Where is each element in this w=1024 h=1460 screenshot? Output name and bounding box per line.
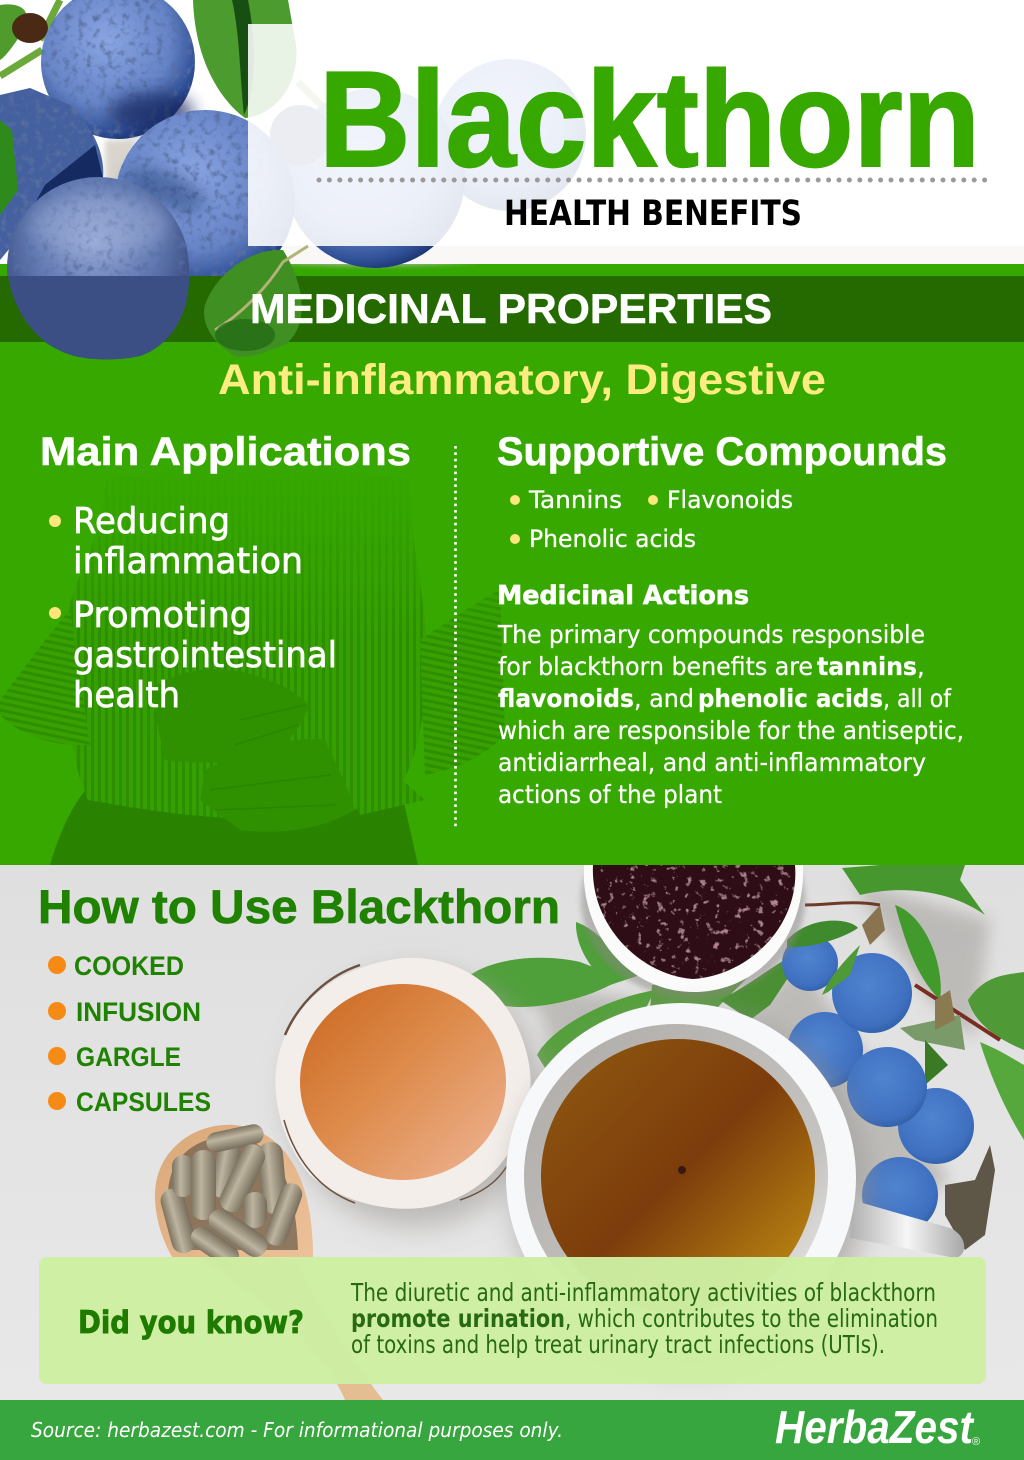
heading: main applications: Main Applications [40,430,411,474]
source note: Source: herbazest.com - For informational purposes only. [31,1418,563,1442]
text: did you know fact: promote urination [351,1304,565,1333]
text: medicinal actions description: for blackthorn benefits are [498,652,813,681]
footer bar [0,1400,1024,1460]
bullet: reducing inflammation: inflammation [73,541,303,582]
callout: did you know [39,1257,986,1384]
illustration: blue plums [782,921,974,1233]
illustration: bowl of jam [578,865,808,1000]
list: uses: CAPSULES [76,1087,211,1117]
list: uses: GARGLE [76,1042,181,1072]
subheading: properties: Anti-inflammatory, Digestive [218,356,826,404]
list: uses: COOKED [74,951,184,981]
text: medicinal actions description: , [917,652,925,681]
text: did you know fact [350,1278,938,1359]
heading: medicinal properties: MEDICINAL PROPERTIES [250,285,772,332]
heading: did you know: Did you know? [78,1305,304,1341]
list: compounds [510,486,793,553]
bullet: promoting gastrointestinal health [49,595,337,716]
bullet: reducing inflammation [49,501,303,582]
text: medicinal actions description: phenolic acids [698,684,883,713]
text: medicinal actions description: flavonoids [498,684,634,713]
list: compounds: Flavonoids [667,486,793,514]
illustration: blackthorn fruits and leaves at top [0,0,1024,359]
heading: how to use: How to Use Blackthorn [38,880,560,933]
text: medicinal actions description: actions of the plant [498,780,722,809]
text: medicinal actions description: tannins [817,652,917,681]
logo registered mark: ® [972,1436,980,1448]
title backing panel [248,24,1024,246]
logo: HerbaZest: HerbaZest [775,1401,974,1453]
band: medicinal properties [0,276,1024,342]
heading: medicinal actions: Medicinal Actions [497,581,749,611]
illustration: silhouette of person holding stomach [0,522,505,865]
text: medicinal actions description: , all of [883,684,952,713]
illustration: photo area of bowls, leaves and plums [155,865,1024,1400]
illustration: bowl of infusion [275,958,543,1226]
bullet: promoting gastrointestinal health: Promoting [73,595,252,636]
illustration: front berry and leaf over band [8,246,308,360]
text: medicinal actions description: which are responsible for the antiseptic, [498,716,964,745]
list: compounds: Phenolic acids [529,525,696,553]
panel: supportive compounds [497,430,964,809]
list: uses [48,951,211,1117]
text: medicinal actions description: antidiarrheal, and anti-inflammatory [498,748,926,777]
heading: supportive compounds: Supportive Compounds [497,430,947,474]
illustration: leaves and twigs behind bowls [470,865,1024,1250]
text: medicinal actions description: , and [634,684,694,713]
illustration: spoon of capsules [155,1122,383,1400]
dotted rule under title [319,178,985,182]
illustration: cup of tea [498,999,964,1257]
list: compounds: Tannins [528,486,622,514]
dotted divider [454,446,457,828]
list: uses: INFUSION [76,997,201,1027]
bullet: promoting gastrointestinal health: health [73,675,180,716]
text: medicinal actions description [497,620,964,809]
bullet: reducing inflammation: Reducing [73,501,230,542]
text: did you know fact: of toxins and help treat urinary tract infections (UTIs). [351,1330,885,1359]
subtitle: HEALTH BENEFITS [504,194,802,234]
bullet: promoting gastrointestinal health: gastrointestinal [73,635,337,676]
text: medicinal actions description: The primary compounds responsible [497,620,925,649]
panel: main applications [40,430,411,716]
title: Blackthorn [319,43,980,195]
text: did you know fact: , which contributes to the elimination [565,1304,938,1333]
